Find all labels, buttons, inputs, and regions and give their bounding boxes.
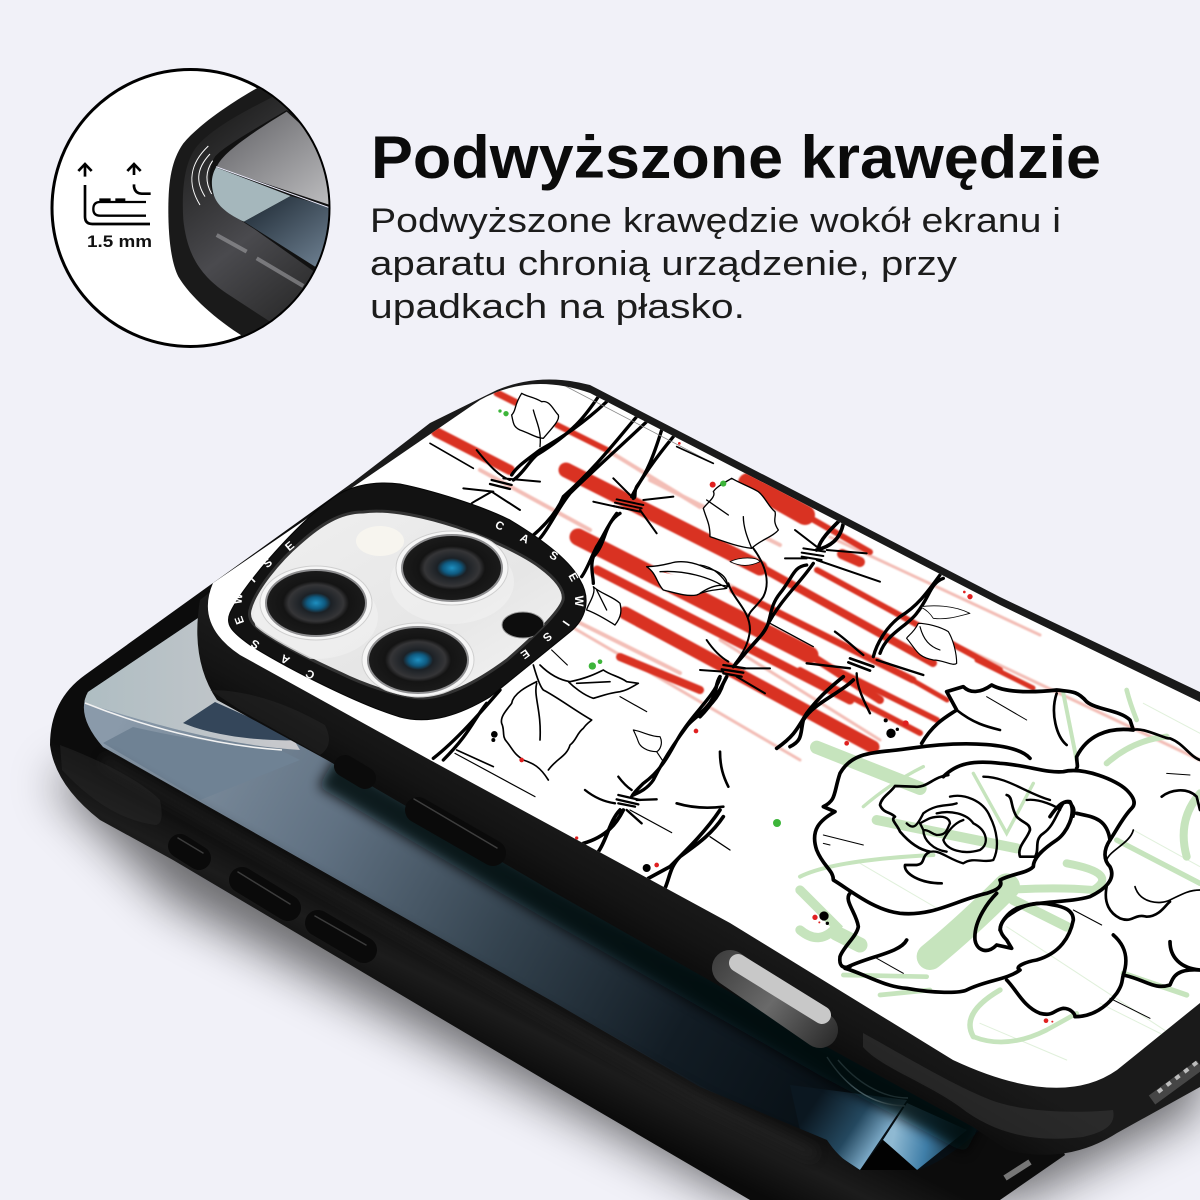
CASEWISE ring lettering: S: [261, 556, 275, 571]
CASEWISE ring lettering: C: [304, 666, 317, 681]
CASEWISE ring lettering: S: [249, 636, 262, 651]
lenses and flash: [254, 526, 544, 697]
title: Podwyższone krawędzie: [371, 124, 1101, 191]
CASEWISE ring lettering: E: [518, 646, 531, 661]
CASEWISE ring lettering: I: [248, 575, 258, 585]
CASEWISE ring lettering: [233, 519, 584, 681]
red paint strokes: [436, 393, 1200, 760]
camera bump outer ring: [228, 483, 586, 720]
close-up photo of case corner: [168, 88, 328, 336]
charging port: [730, 963, 822, 1030]
white case artwork: [208, 384, 1200, 1088]
description text: Podwyższone krawędzie wokół ekranu i: [370, 202, 1061, 240]
speaker grille: [1152, 1065, 1200, 1100]
frame inner highlight: [103, 760, 815, 1155]
carbon corner bumper: [60, 745, 162, 825]
icon: raised edge diagram with arrows: [78, 164, 151, 224]
screen with wallpaper reflections: [80, 600, 980, 1170]
CASEWISE ring lettering: A: [518, 532, 531, 547]
barbed wire and leaves, lower: [433, 650, 730, 888]
phone drop shadow: [50, 700, 1200, 1200]
lower phone with screen: [50, 483, 1065, 1200]
side buttons: lower phone: [178, 838, 366, 950]
camera glass opening: [249, 511, 563, 698]
rose line art: [812, 685, 1200, 1023]
CASEWISE ring lettering: W: [233, 593, 245, 605]
shadow of upper phone on screen: [327, 772, 973, 1138]
camera island: [228, 483, 586, 720]
carbon corner bumpers: [210, 690, 329, 755]
CASEWISE ring lettering: S: [547, 549, 560, 564]
CASEWISE ring lettering: E: [233, 614, 247, 626]
CASEWISE ring lettering: W: [572, 596, 584, 607]
green graffiti strokes: [800, 690, 1200, 1060]
description text: upadkach na płasko.: [370, 288, 745, 326]
CASEWISE ring lettering: I: [560, 618, 571, 627]
case body and raised rim: [197, 380, 1200, 1155]
description text: aparatu chronią urządzenie, przy: [370, 245, 957, 283]
upper phone case: [190, 370, 1200, 1155]
CASEWISE ring lettering: E: [283, 539, 297, 554]
barbed wire and leaves, upper right: [700, 478, 973, 748]
CASEWISE ring lettering: A: [279, 651, 292, 666]
green dot: [773, 819, 781, 827]
description text: [370, 202, 1061, 326]
bottom corner gloss: [863, 1033, 1114, 1139]
barbed wire and leaves, upper left: [430, 385, 727, 625]
CASEWISE ring lettering: S: [540, 629, 554, 644]
CASEWISE ring lettering: E: [565, 571, 580, 584]
label: 1.5 mm: 1.5 mm: [87, 233, 152, 251]
inset circle: raised edge close-up: [50, 68, 330, 348]
lower phone frame: [50, 483, 1065, 1200]
lower phone bottom port: [1005, 1162, 1030, 1178]
CASEWISE ring lettering: C: [493, 519, 506, 534]
buttons: upper phone: [345, 766, 497, 853]
